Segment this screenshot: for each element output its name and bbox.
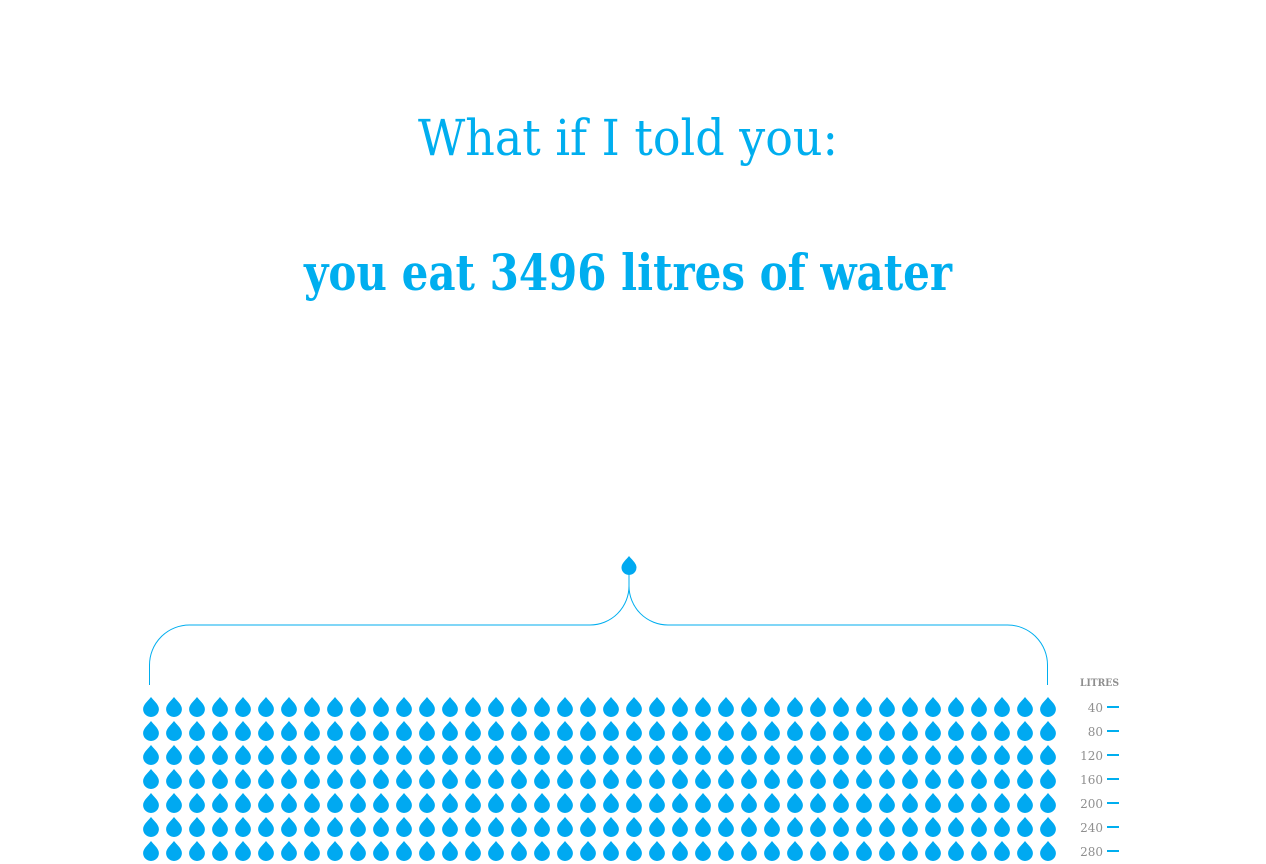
drop row 4 <box>143 769 1056 789</box>
scale label 120: 120 <box>1080 749 1103 763</box>
drop row 5 <box>143 793 1056 813</box>
scale label 40: 40 <box>1088 701 1103 715</box>
scale label 280 <box>1080 845 1119 859</box>
water drop grid: 40 litres per row <box>143 697 1056 861</box>
scale label 160 <box>1080 773 1119 787</box>
scale label 80 <box>1088 725 1119 739</box>
litres scale <box>1080 678 1119 859</box>
scale label 120 <box>1080 749 1119 763</box>
drop row 6 <box>143 817 1056 837</box>
scale label 240: 240 <box>1080 821 1103 835</box>
heading: you eat 3496 litres of water: you eat 3496 litres of water <box>303 243 953 302</box>
scale label 80: 80 <box>1088 725 1103 739</box>
scale label 40 <box>1088 701 1119 715</box>
drop row 7 <box>143 841 1056 861</box>
title: what if I told you: What if I told you: <box>418 109 838 167</box>
scale label 200: 200 <box>1080 797 1103 811</box>
scale label 240 <box>1080 821 1119 835</box>
drop row 2 <box>143 721 1056 741</box>
scale label 160: 160 <box>1080 773 1103 787</box>
drop row 1 <box>143 697 1056 717</box>
drop row 3 <box>143 745 1056 765</box>
scale heading: LITRES <box>1080 678 1119 689</box>
scale label 280: 280 <box>1080 845 1103 859</box>
scale label 200 <box>1080 797 1119 811</box>
icon: single water drop <box>621 556 637 575</box>
bracket connecting drop to grid <box>150 574 1048 685</box>
